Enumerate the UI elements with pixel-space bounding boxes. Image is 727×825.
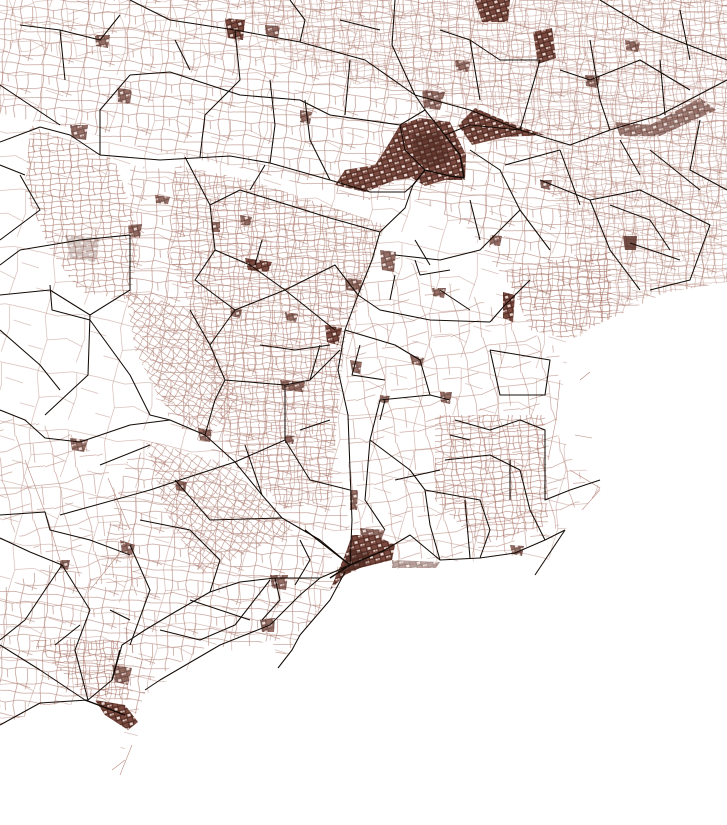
road: south-west approach xyxy=(85,650,125,715)
region: south-west fields xyxy=(145,440,295,575)
road: Lecce bypass xyxy=(413,135,464,185)
road: northern east-west trunk xyxy=(0,80,727,192)
heavy trunk highlights xyxy=(85,135,464,715)
road: port approach xyxy=(305,530,385,578)
region: east lobe xyxy=(505,250,612,340)
road: south-west coastal trunk xyxy=(0,565,350,725)
town: scattered small settlements xyxy=(60,25,640,685)
stray minor roads xyxy=(0,372,600,775)
road: central north-south trunk xyxy=(338,185,413,565)
town: east xyxy=(623,236,637,250)
town: northern extension of port xyxy=(360,528,385,548)
town: south-west tip xyxy=(95,700,138,730)
road: central web xyxy=(175,280,530,525)
town: coastal strip xyxy=(392,560,440,568)
road: western trunk xyxy=(0,410,350,565)
road: ring and north links xyxy=(130,0,727,170)
town footprints xyxy=(60,0,716,730)
region: south-east interior xyxy=(345,240,590,560)
region: far south-west xyxy=(0,560,150,725)
town: central small A xyxy=(325,325,342,345)
town: north-west xyxy=(225,18,245,40)
region: north belt infill xyxy=(0,0,727,270)
town: central small B xyxy=(245,258,272,272)
region: north dense top xyxy=(240,0,727,130)
region: south-east fields xyxy=(435,415,548,545)
town: top right cluster xyxy=(533,28,556,64)
region: west coast belt xyxy=(0,410,150,600)
road: south-east spurs xyxy=(365,435,565,575)
road: western south xyxy=(0,445,220,715)
region: central plain xyxy=(130,165,385,530)
town: west grid xyxy=(65,235,100,262)
town: top cluster xyxy=(475,0,510,22)
region: north-east fields xyxy=(540,110,727,320)
region: diagonal fields xyxy=(125,290,240,440)
region: western grid xyxy=(25,125,140,300)
town: southern port xyxy=(330,535,395,590)
region: far south-west overlay xyxy=(30,640,130,700)
town: Lecce core xyxy=(412,132,450,168)
road: mid-north fans xyxy=(0,157,380,420)
road: south-east trunk xyxy=(350,530,565,565)
town: port core xyxy=(340,550,370,575)
road: eastern interior xyxy=(390,150,710,558)
town: Lecce area xyxy=(335,118,466,192)
region: central plain lower grid xyxy=(170,165,385,510)
town: south-east lobe xyxy=(503,292,515,322)
road: northern secondaries xyxy=(0,0,727,190)
town: north-east of Lecce xyxy=(458,108,545,145)
town: east strip xyxy=(615,98,716,136)
region: south-west plain xyxy=(100,450,340,680)
road: south-west spurs xyxy=(145,540,345,690)
region: north belt xyxy=(0,0,727,330)
